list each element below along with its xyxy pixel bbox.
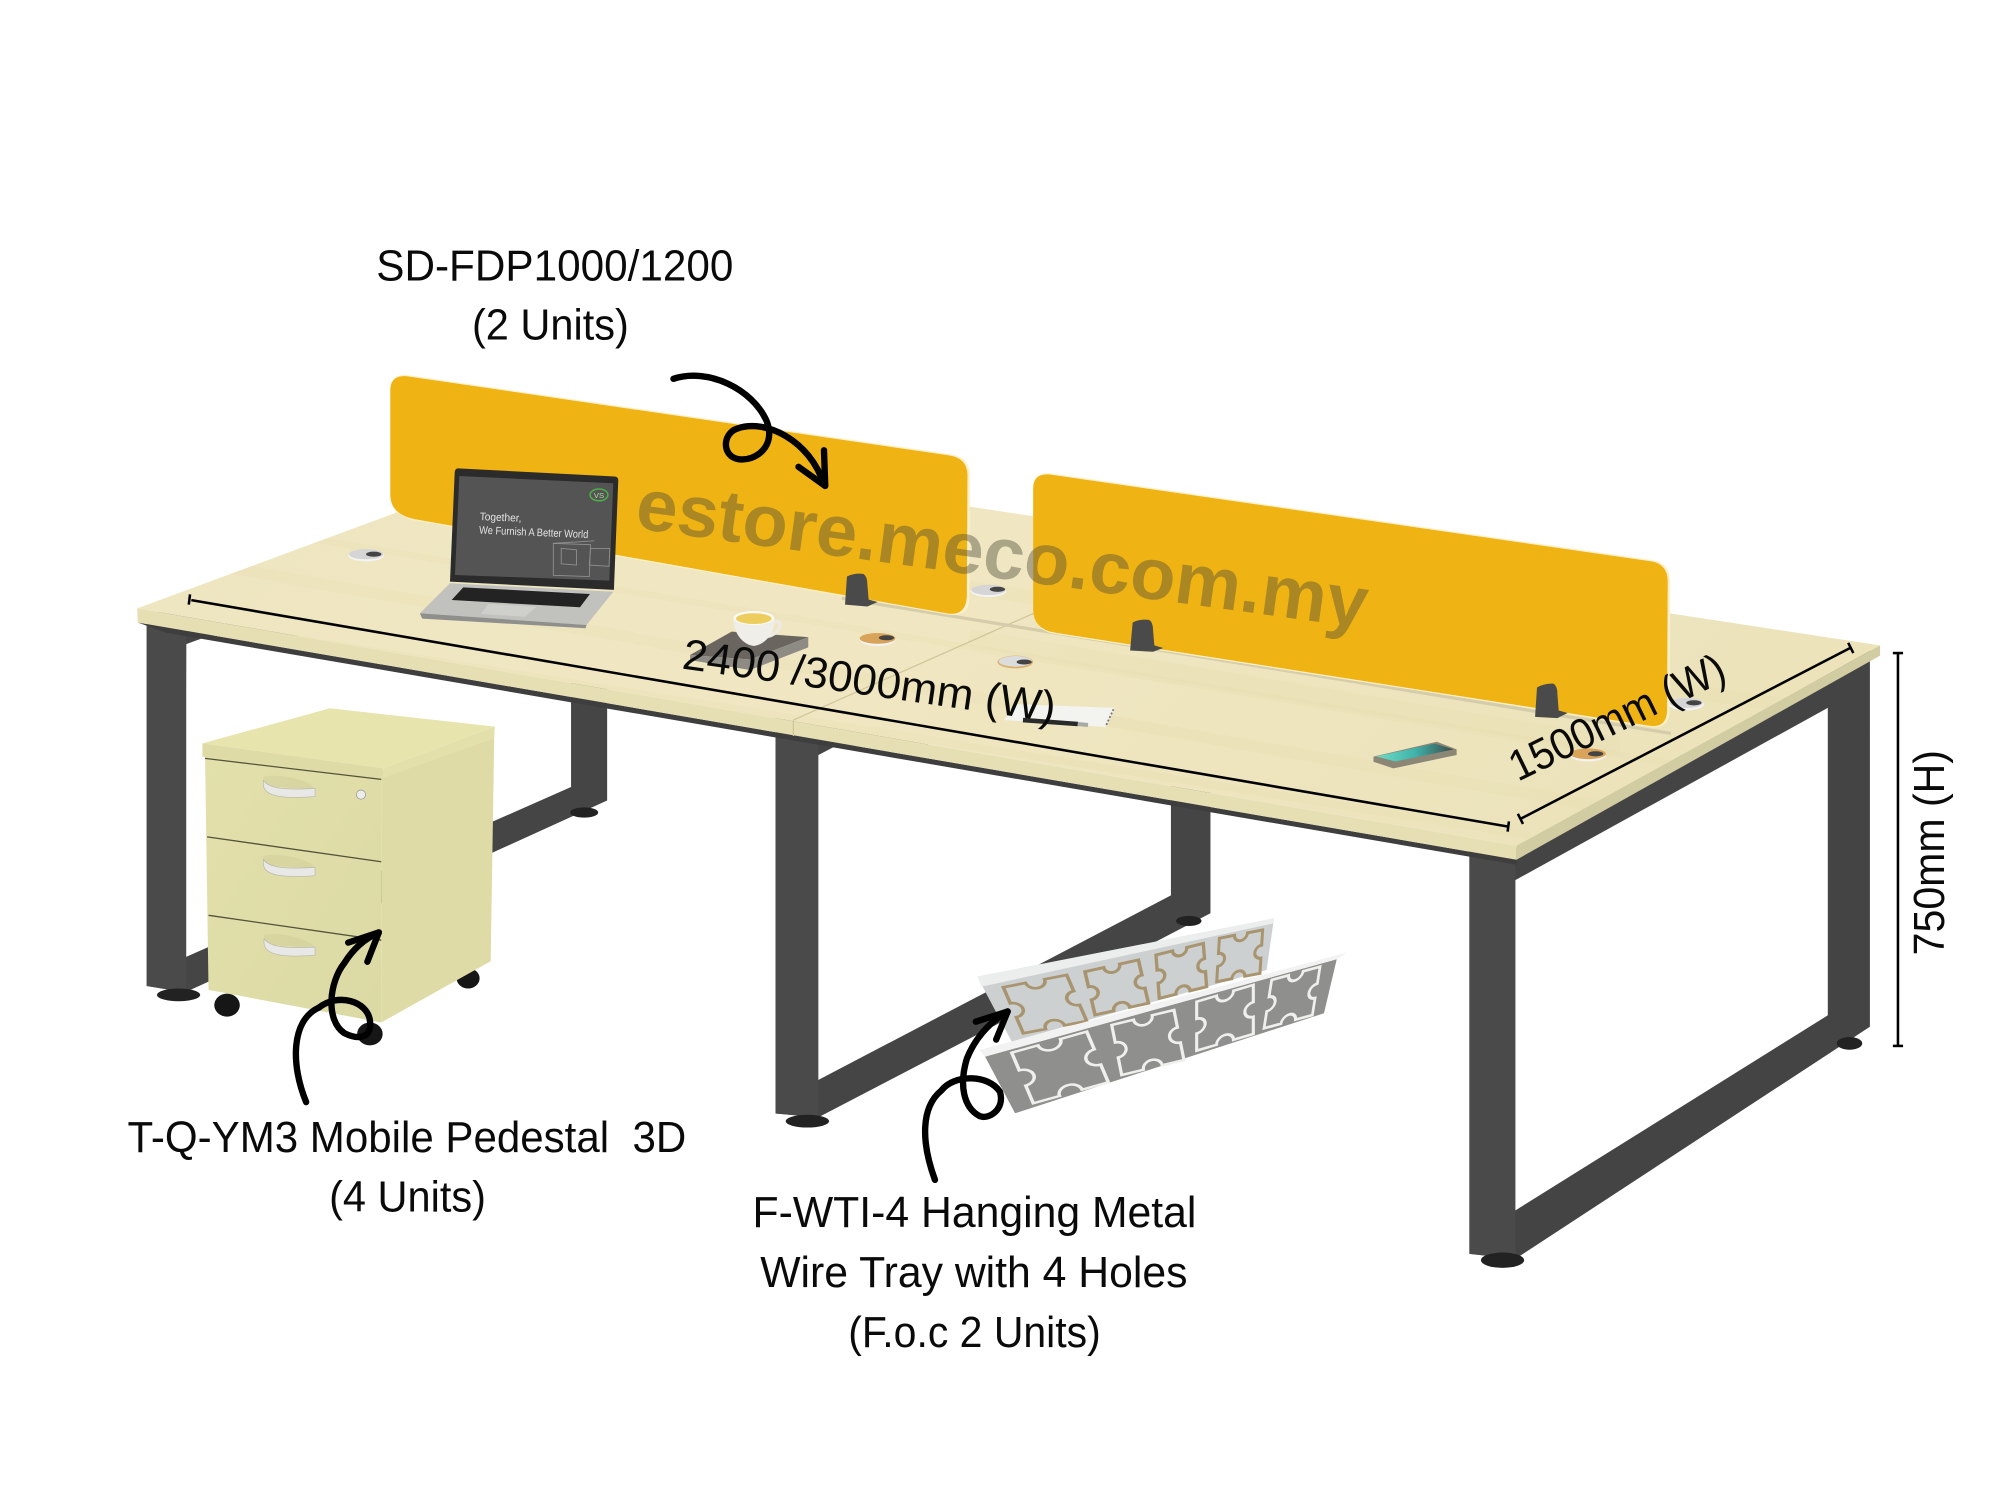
- drawer lines: [205, 758, 381, 940]
- screen text: Together,: [479, 511, 522, 525]
- back tray: [977, 918, 1274, 1042]
- laptop screen: [450, 468, 618, 590]
- pedestal front: [205, 753, 381, 1022]
- label: mobile pedestal: (4 Units): [329, 1174, 486, 1222]
- mobile pedestal: [202, 708, 495, 1045]
- label: depth dimension: 1500mm (W): [1501, 645, 1733, 791]
- dimension line: width: [189, 594, 1509, 832]
- label: wire tray: Wire Tray with 4 Holes: [760, 1249, 1187, 1297]
- pedestal side: [381, 733, 494, 1022]
- panel: divider right SD-FDP: [1033, 473, 1670, 727]
- arrow: to wire tray: [925, 1011, 1008, 1180]
- coffee cup on book: [690, 611, 808, 670]
- book: [690, 632, 808, 659]
- screen text: [479, 511, 589, 541]
- screen logo: VS: [594, 491, 604, 500]
- desk frame legs: [147, 612, 1870, 1268]
- laptop base: [420, 583, 613, 625]
- drawer lock: [356, 790, 366, 799]
- desktop: [137, 506, 1880, 864]
- label: width dimension: 2400 /3000mm (W): [680, 631, 1059, 732]
- laptop: [420, 468, 618, 628]
- hanging wire trays: [977, 918, 1347, 1113]
- panel: divider left SD-FDP: [390, 375, 970, 615]
- screen text: We Furnish A Better World: [479, 525, 589, 541]
- label: height dimension: 750mm (H): [1906, 750, 1954, 955]
- drawer handles: [263, 776, 315, 956]
- front tray: [979, 953, 1347, 1113]
- dimension line: depth: [1518, 643, 1853, 824]
- keyboard: [452, 587, 590, 607]
- label: mobile pedestal: T-Q-YM3 Mobile Pedestal 3D: [128, 1114, 686, 1162]
- arrow: to divider panel: [673, 376, 825, 486]
- watermark: estore.meco.com.my: [632, 464, 1374, 644]
- casters: [214, 968, 480, 1045]
- screen sketch: [553, 541, 610, 577]
- smartphone: [1373, 742, 1457, 768]
- arrow: to pedestal: [296, 932, 379, 1102]
- left leg frame: [147, 612, 607, 1001]
- label: mobile pedestal: [128, 1114, 686, 1222]
- label: divider panel: [376, 243, 733, 349]
- cup: [768, 621, 780, 636]
- pedestal top: [202, 708, 495, 768]
- label: divider panel: (2 Units): [472, 301, 629, 349]
- right leg frame: [1469, 651, 1870, 1268]
- label: wire tray: (F.o.c 2 Units): [848, 1309, 1101, 1357]
- notepad and pen: [1004, 704, 1115, 727]
- label: wire tray: F-WTI-4 Hanging Metal: [753, 1189, 1196, 1237]
- label: wire tray: [753, 1189, 1196, 1357]
- cable grommets: [348, 549, 1704, 761]
- middle leg frame: [776, 714, 1210, 1128]
- dimension line: height: [1893, 653, 1903, 1046]
- panel clamps: [845, 574, 1568, 718]
- label: divider panel: SD-FDP1000/1200: [376, 243, 733, 291]
- screen logo: [590, 489, 608, 501]
